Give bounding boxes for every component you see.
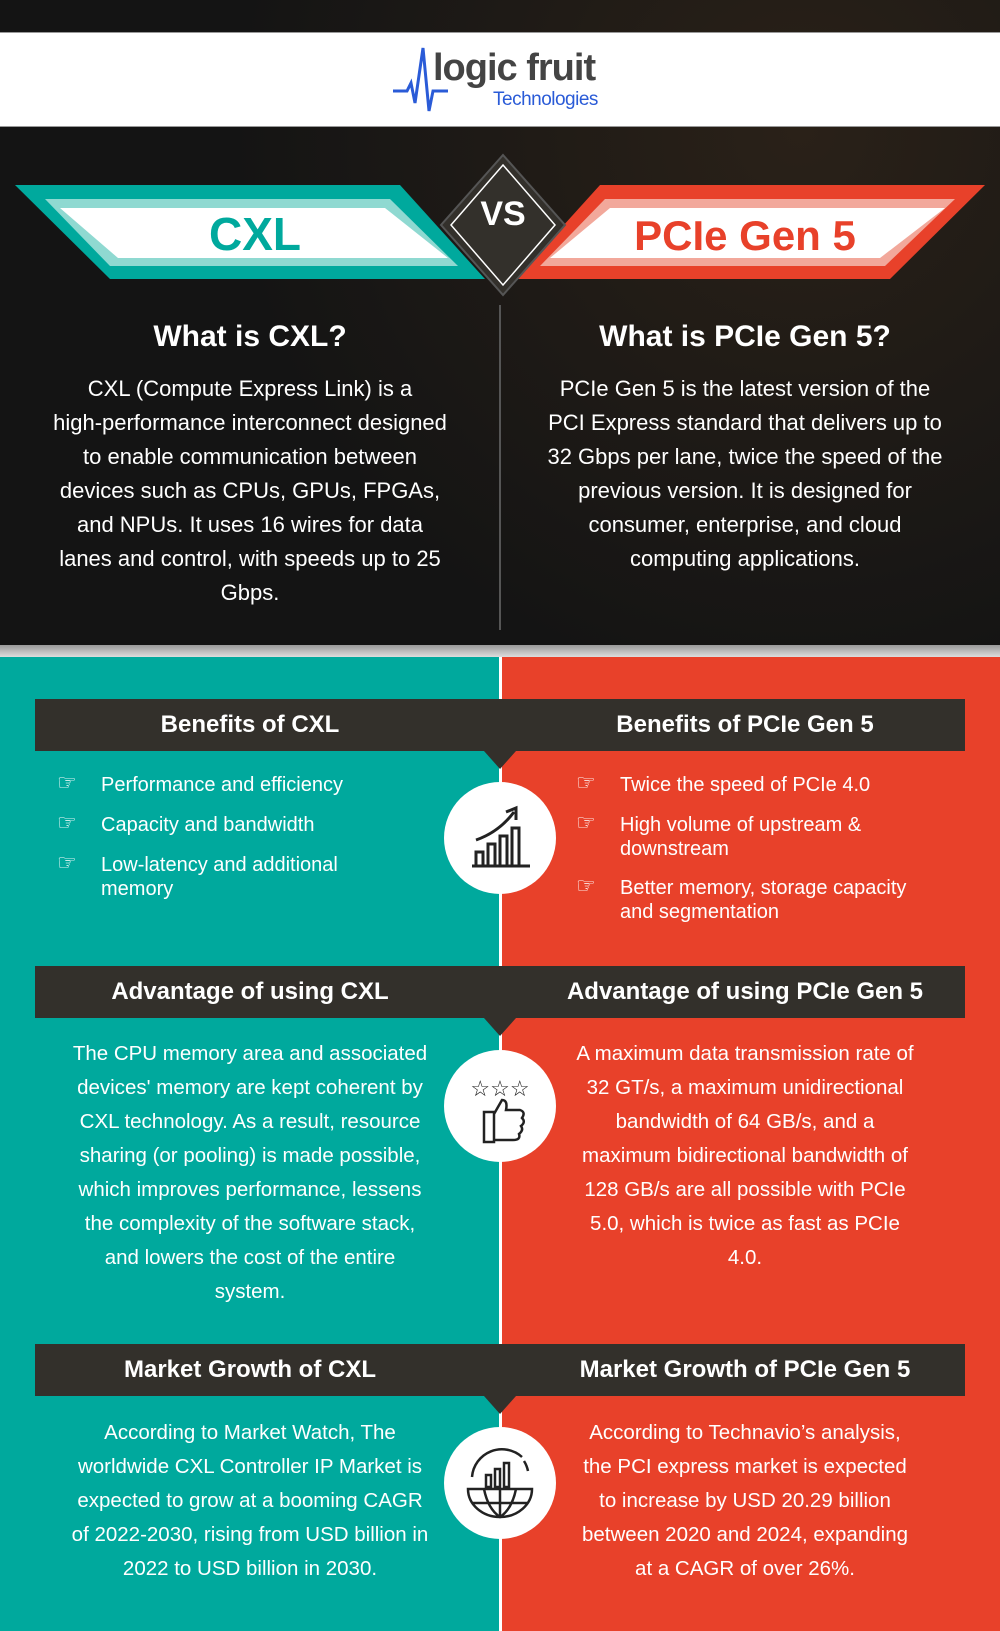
icon: thumbs up stars	[444, 1050, 556, 1162]
text: CXL description: CXL (Compute Express Link) is a high-performance interconnect designed to enable communication between devices such as CPUs, GPUs, FPGAs, and NPUs. It uses 16 wires for data lanes and control, with speeds up to 25 Gbps.	[53, 376, 447, 605]
CXL benefit list: Performance and efficiency	[101, 774, 343, 796]
PCIe benefit list	[576, 770, 906, 923]
strip	[0, 645, 1000, 657]
PCIe benefit list: High volume of upstream & downstream	[620, 814, 861, 860]
text: PCIe description: PCIe Gen 5 is the latest version of the PCI Express standard that delivers up to 32 Gbps per lane, twice the speed of the previous version. It is designed for consumer, enterprise, and cloud computing applications.	[547, 376, 943, 571]
CXL benefit list: Low-latency and additional memory	[101, 854, 338, 900]
heading: what is PCIe: What is PCIe Gen 5?	[599, 320, 891, 353]
market header: Market Growth of CXL	[124, 1356, 376, 1383]
heading: what is CXL: What is CXL?	[153, 320, 347, 353]
PCIe banner	[515, 185, 985, 279]
benefits header: Benefits of PCIe Gen 5	[616, 711, 874, 738]
advantage header: Advantage of using PCIe Gen 5	[567, 978, 923, 1005]
PCIe benefit list: ☞	[576, 873, 596, 898]
PCIe benefit list: Better memory, storage capacity and segmentation	[620, 877, 906, 923]
text: CXL market: According to Market Watch, The worldwide CXL Controller IP Market is expected to grow at a booming CAGR of 2022-2030, rising from USD billion in 2022 to USD billion in 2030.	[72, 1421, 428, 1580]
divider line top	[499, 305, 501, 630]
market header	[35, 1344, 965, 1396]
text: PCIe advantage: A maximum data transmission rate of 32 GT/s, a maximum unidirectional bandwidth of 64 GB/s, and a maximum bidirectional bandwidth of 128 GB/s are all possible with PCIe 5.0, which is twice as fast as PCIe 4.0.	[576, 1042, 914, 1269]
text: CXL advantage: The CPU memory area and associated devices' memory are kept coherent by CXL technology. As a result, resource sharing (or pooling) is made possible, which improves performance, lessens the complexity of the software stack, and lowers the cost of the entire system.	[73, 1042, 427, 1303]
text: PCIe market: According to Technavio’s analysis, the PCI express market is expected to increase by USD 20.29 billion between 2020 and 2024, expanding at a CAGR of over 26%.	[582, 1421, 908, 1580]
background dark	[0, 0, 1000, 650]
PCIe benefit list: Twice the speed of PCIe 4.0	[620, 774, 870, 796]
PCIe banner: PCIe Gen 5	[634, 212, 856, 259]
PCIe benefit list: ☞	[576, 810, 596, 835]
icon: growth chart	[444, 782, 556, 894]
logo: logic fruit	[433, 47, 595, 89]
panel: teal	[0, 657, 500, 1631]
CXL banner	[15, 185, 485, 279]
benefits header: Benefits of CXL	[161, 711, 339, 738]
benefits header	[35, 699, 965, 751]
advantage header	[35, 966, 965, 1018]
PCIe benefit list: ☞	[576, 770, 596, 795]
icon: thumbs up stars: ☆☆☆	[470, 1076, 530, 1101]
VS diamond	[441, 155, 565, 295]
icon: globe growth	[444, 1427, 556, 1539]
header logo band	[0, 32, 1000, 127]
advantage header: Advantage of using CXL	[111, 978, 389, 1005]
VS diamond: VS	[480, 195, 526, 233]
logo	[393, 47, 598, 112]
CXL benefit list: ☞	[57, 850, 77, 875]
CXL benefit list: ☞	[57, 770, 77, 795]
CXL benefit list: Capacity and bandwidth	[101, 814, 314, 836]
CXL banner: CXL	[209, 208, 301, 260]
panel: red	[500, 657, 1000, 1631]
banners	[15, 154, 985, 296]
market header: Market Growth of PCIe Gen 5	[580, 1356, 910, 1383]
logo: Technologies	[493, 89, 598, 110]
CXL benefit list	[57, 770, 343, 900]
CXL benefit list: ☞	[57, 810, 77, 835]
